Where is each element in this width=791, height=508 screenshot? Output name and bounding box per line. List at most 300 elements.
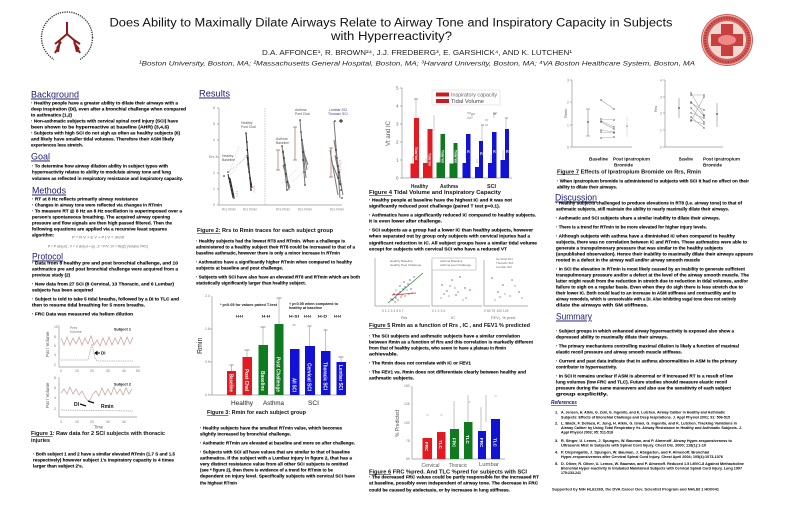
chart: figure 3 bars: 2.4 — [205, 294, 210, 298]
text: summary: · In SCI it remains unclear if ASM is abnormal or if increased RT is a result of low — [556, 374, 733, 378]
affiliations: ¹Boston University, Boston, MA; ²Massachusetts General Hospital, Boston, MA; ³Harvard University, Boston, MA; ⁴VA Boston Healthcare System, Boston, MA — [139, 60, 696, 68]
chart: figure 3 bars: Baseline — [259, 371, 265, 391]
chart: raw data subject 2: 30 — [106, 420, 110, 424]
text: discussion: airway remodels, which is unresolvable with a DI. Also inhibiting vagal tone does not entirely — [556, 296, 736, 302]
chart: figure 3 bars: † p<0.05 when compared to — [289, 302, 339, 306]
text: discussion: their lower IC. Both could lead to an increase in ASM stiffness and contractility and to — [556, 290, 736, 296]
chart: raw data subject 1: 8 — [54, 335, 56, 339]
text: references: D. Oliver, R. Oliver, U. Lemos, W. Bauman, and P. Almenoff. Reduced 1.5 LMVC-8 Against Methacholine — [561, 461, 745, 466]
chart: figure 2 traces: Baseline — [276, 141, 289, 145]
text: figure 4 notes: significantly reduced post challenge (paired T test p=0.1). — [369, 204, 500, 208]
heading: Discussion: Discussion — [555, 192, 597, 204]
text: goal: hyperreactivity relates to ability to modulate airway tone and lung — [32, 170, 171, 174]
text: figure 4 notes: significant reduction in IC. All subject groups have a similar tidal volume — [369, 240, 537, 246]
chart: figure 7 ipratropium left: 0 — [567, 146, 569, 150]
chart: figure 4 tidal volume and IC: 2 — [396, 140, 399, 144]
text: figure 3 notes: slightly increased by bronchial challenge. — [200, 432, 291, 436]
text: discussion: rooted in a defect in the airway wall and/or airway smooth muscle — [556, 258, 700, 262]
chart: raw data subject 2: 0 — [60, 420, 62, 424]
chart: raw data subject 2: 40 — [122, 420, 126, 424]
text: references: 1. — [555, 410, 558, 414]
text: protocol: · Subject is told to take 5 tidal breaths, followed by a DI to TLC and — [32, 296, 179, 302]
text: figure 3 notes: asthmatics. If the subject with a Lumbar injury in figure 2, that has a — [200, 456, 352, 460]
text: references: 4. — [555, 450, 558, 454]
chart: figure 6 FRC and TLC: TLC — [492, 438, 498, 447]
chart: figure 2 traces: 4 — [213, 138, 215, 142]
text: figure 3 notes: dependent on injury level. Specifically subjects with cervical SCI have — [200, 474, 355, 478]
text: background: experiences less stretch. — [31, 142, 83, 148]
chart: figure 3 bars — [197, 294, 346, 407]
chart: raw data subject 1: 50 — [136, 369, 140, 373]
chart: figure 6 FRC and TLC: FRC — [424, 442, 429, 452]
chart: figure 3 bars: H-H — [262, 314, 270, 318]
chart: figure 3 bars: H-H — [334, 314, 341, 318]
text: discussion: (unpublished observation). Hence their inability to maximally dilate their airways appears — [556, 252, 753, 256]
title: with Hyperreactivity? — [330, 31, 452, 43]
chart: figure 6 FRC and TLC: TLC — [438, 440, 443, 449]
text: protocol: subjects has been acquired — [32, 288, 93, 292]
chart: figure 5 scatter plots: Asthma Baseline — [440, 259, 463, 263]
text: figure 5 notes: from that of healthy subjects, who seem to have a plateau in Rmin — [369, 346, 506, 350]
text: references: P. Dicpinigaitis, J. Spungen, W. Bauman, J. Absgarten, and P. Almenoff. Bronchial — [561, 450, 709, 454]
chart: figure 3 bars: Asthma — [263, 401, 285, 407]
text: summary: group explicitly. — [556, 392, 608, 396]
chart: figure 4 tidal volume and IC: Tidal Vol — [454, 150, 458, 163]
text: goal: volumes as reflected in respiratory resistance and inspiratory capacity. — [32, 176, 183, 181]
chart: figure 6 FRC and TLC: 100 — [404, 421, 410, 425]
text: protocol: asthmatics pre and post bronchial challenge were acquired from a — [32, 266, 178, 272]
text: discussion: subjects, there was no correlation between IC and RTmin. These asthmatics were able to — [556, 240, 747, 244]
chart: figure 4 tidal volume and IC: Tidal Vol — [440, 150, 444, 163]
text: references: Hyper-responsiveness after Cervical Spinal Cord Injury. Chest April 2004; 105(4):1073-1076 — [561, 454, 724, 459]
chart: figure 2 traces: 6 — [213, 106, 215, 110]
chart: raw data subject 2: 20 — [90, 420, 94, 424]
chart: raw data subject 1: 6 — [54, 344, 56, 348]
text: references: 2. — [555, 420, 558, 426]
icon: lung logo — [42, 12, 92, 65]
chart: raw data subject 1: 40 — [122, 369, 126, 373]
chart: raw data subject 2: Subject 2 — [114, 382, 132, 386]
chart: raw data subject 1: DI — [101, 350, 106, 356]
chart: figure 3 bars: H-D — [318, 314, 327, 318]
text: methods — [32, 196, 182, 238]
chart: figure 5 scatter plots: 0 1 2 3 4 5 6 7 — [382, 309, 404, 313]
chart: figure 3 bars: H-H — [304, 314, 311, 318]
chart: raw data subject 1 — [45, 325, 140, 373]
chart: raw data subject 1: 10 — [75, 369, 79, 373]
chart: figure 3 bars: Cervical SCI — [306, 363, 312, 392]
text: references: R. Singer, U. Lemes, J. Spungen, W. Bauman, and P. Almenoff. Airway Hyper-responsiveness to — [561, 438, 733, 443]
heading: Results: Results — [199, 88, 230, 100]
chart: figure 2 traces: 5 — [213, 122, 215, 126]
text: references: Appl Physiol 2003; 95: 511-518 — [561, 430, 614, 434]
chart: figure 6 FRC and TLC: Cervical — [422, 463, 440, 469]
text: references: Airway Caliber by Using Total Respiratory Vs. Airway Resistance in Healthy and Asthmatic Subjects. J. — [561, 425, 742, 430]
text: methods: · Changes in airway tone were reflected via changes in RTmin — [32, 202, 162, 208]
chart: figure 2 traces: Asthma — [295, 108, 307, 112]
caption: figure 1: Figure 1 : Raw data for 2 SCI subjects with thoracic — [31, 431, 165, 437]
chart: figure 6 FRC and TLC: Thoracic — [449, 463, 467, 469]
text: funding: Supported by NIH HL62269, the DVA Career Dev. Scientist Program and NHLBI 1 HD0041 — [552, 486, 720, 492]
text: figure 2 notes: baseline asthmatic, however there is only a minor increase in RTmin — [196, 250, 340, 256]
chart: raw data subject 2: 2 — [54, 407, 56, 411]
chart: figure 6 FRC and TLC: 150 — [404, 384, 410, 388]
chart: raw data subject 2: 4 — [54, 396, 56, 400]
chart: figure 2 traces: Post Chal — [295, 112, 310, 116]
chart: figure 5 scatter plots: Healthy Baseline — [390, 259, 413, 263]
text: discussion: · There is a trend for RTmin to be more elevated for higher injury levels. — [556, 224, 707, 230]
chart: figure 3 bars: * p<0.05 for values paired T-test — [220, 303, 278, 307]
chart: figure 5 scatter plots: 0 50 75 100 125 — [484, 309, 509, 313]
text: figure 2 notes — [196, 238, 360, 286]
caption: figure 6: Figure 6 FRC %pred. And TLC %pred for subjects with SCI — [369, 470, 528, 476]
text: figure 5 notes: · The FEV1 vs. Rmin does not differentiate clearly between healthy and — [369, 370, 526, 374]
text: summary: elastic recoil pressure and airway smooth muscle stiffness. — [556, 350, 682, 354]
chart: raw data subject 1: Pres — [70, 326, 77, 330]
text: references: 3. — [555, 438, 558, 443]
text: discussion: asthmatic subjects, still maintain the ability to nearly maximally dilate their airways. — [556, 206, 729, 212]
chart: figure 2 traces: Thoracic SCI — [328, 112, 348, 116]
chart: figure 5 scatter plots: Thoracic SCI — [496, 261, 514, 265]
text: figure 2 notes: statistically significantly larger than healthy subject. — [196, 280, 306, 286]
chart: figure 2 traces: Healthy — [222, 154, 234, 158]
text: discussion: dilate the airways with SM stiffness. — [556, 302, 648, 308]
chart: figure 6 FRC and TLC: 75 — [406, 439, 410, 443]
text: methods: algorithm: — [32, 232, 54, 238]
text: figure 4 notes: except for subjects with cervical SCI who have a reduced VT — [369, 246, 507, 252]
text: background: been shown to be hyperreactive at baseline (AHR) (3,4,5) — [31, 124, 169, 130]
chart: raw data subject 1: Volume — [70, 330, 82, 334]
chart: raw data subject 1: 10 — [54, 325, 58, 329]
chart: figure 3 bars: 0.0 — [205, 393, 210, 397]
text: discussion: failure to sigh on a regular basis. Even when they do sigh there is less stretch due to — [556, 284, 743, 290]
text: protocol: previous study (2) — [32, 272, 70, 278]
chart: figure 2 traces: 2 — [213, 171, 215, 175]
labels: figure 7 axes: Baseline — [679, 156, 693, 162]
labels: figure 7 axes: Post Ipratropium — [703, 156, 740, 162]
text: protocol: then to resume tidal breathing for 5 more breaths. — [32, 302, 145, 308]
text: goal — [32, 164, 183, 181]
text: protocol: · New data from 27 SCI (8 Cervical, 13 Thoracic, and 6 Lumbar) — [32, 282, 174, 286]
chart: raw data subject 2: 6 — [54, 386, 56, 390]
heading: Background: Background — [31, 90, 79, 100]
chart: figure 7 ipratropium left: 1 — [567, 124, 569, 128]
chart: figure 4 tidal volume and IC: 1 — [396, 158, 399, 162]
chart: figure 5 scatter plots: FEV₁, % pred. — [491, 315, 516, 320]
labels: figure 7 axes: Baseline — [589, 156, 608, 162]
chart: figure 3 bars: 0.9 — [205, 360, 210, 364]
text: figure 3 notes: · Subjects with SCI all have values that are similar to that of baseline — [200, 450, 350, 454]
chart: figure 4 tidal volume and IC: Tidal Vol — [414, 147, 418, 160]
chart: figure 3 bars: Baseline — [228, 374, 234, 392]
chart: figure 7 ipratropium left: Rmin — [563, 109, 568, 118]
text: figure 6 notes — [369, 474, 539, 492]
text: figure 6 notes: · The decreased FRC values could be partly responsible for the increased RT — [369, 474, 539, 480]
chart: figure 2 traces: Rrs Rmin — [243, 208, 257, 212]
chart: figure 4 tidal volume and IC: Vt and IC — [386, 120, 392, 146]
chart: raw data subject 2: Pat / Volume — [45, 382, 50, 408]
chart: figure 4 tidal volume and IC: Tidal Volume — [451, 99, 484, 105]
text: figure 7 notes: ability to dilate their airways. — [557, 184, 617, 190]
text: background: and likely have smaller tidal volumes. Therefore their ASM likely — [31, 136, 174, 142]
chart: raw data subject 1: 2 — [54, 363, 56, 367]
chart: raw data subject 1: 0 — [60, 369, 62, 373]
text: references: 5. — [555, 461, 558, 466]
chart: raw data subject 1: 30 — [106, 369, 110, 373]
chart: figure 3 bars: Thoracic SCI — [322, 362, 328, 391]
chart: figure 5 scatter plots — [375, 257, 528, 320]
text: summary: contributor to hyperreactivity. — [556, 364, 617, 370]
text: summary: depressed ability to maximally dilate their airways. — [556, 334, 668, 340]
chart: figure 4 tidal volume and IC: Inspiratory capacity — [451, 92, 497, 98]
chart: figure 4 tidal volume and IC: Healthy — [411, 184, 429, 190]
chart: figure 3 bars: H-H — [236, 314, 243, 318]
text: discussion: · Asthmatic and SCI subjects share a similar inability to dilate their airways. — [556, 216, 720, 220]
chart: figure 3 bars: Healthy — [231, 401, 253, 407]
chart: figure 7 ipratropium left: 3 — [567, 78, 569, 82]
labels: figure 7 axes: Bromide — [614, 162, 633, 168]
equations: P = R V + E V + P | V = dV/dt — [72, 236, 125, 240]
text: figure 3 notes: · Healthy subjects have the smallest RTmin value, which becomes — [200, 426, 342, 430]
text: figure 3 notes: the highest RTmin — [200, 480, 237, 486]
text: figure 4 notes: when separated out by group only subjects with cervical injuries had a — [368, 234, 530, 238]
chart: figure 2 traces: Rrs Rmin — [330, 208, 344, 212]
text: discussion: generate a transpulmonary pressure that was similar to the healthy subjects — [556, 246, 723, 250]
caption: figure 5: Figure 5 Rmin as a function of Rrs , IC , and FEV1 % predicted — [369, 323, 530, 329]
text: references: A. Jensen, H. Atkin, G. Zeki, G. Ingenito, and K. Lutchen. Airway Caliber in Healthy and Asthmatic — [561, 410, 726, 414]
text: references: Ultrasonic Mist in Subjects with Spinal Cord Injury. Chest Dis. 2000; 118(1):1-10 — [561, 442, 706, 448]
text: summary: · The primary mechanisms controlling maximal dilation is likely a function of maximal — [556, 344, 739, 348]
text: methods: pressure and flow signals are then high passed filtered. Then the — [32, 220, 172, 226]
chart: figure 5 scatter plots: Rrs — [401, 315, 407, 320]
chart: figure 4 tidal volume and IC: 5 — [396, 86, 399, 90]
chart: figure 2 traces: Lumbar SCI — [329, 108, 347, 112]
text: discussion: · Although subjects with asthma have a diminished IC when compared to healthy — [556, 234, 735, 238]
text: discussion — [556, 200, 753, 308]
text: figure 4 notes: · Healthy people at baseline have the highest IC and it was not — [369, 198, 512, 202]
text: figure 4 notes: · SCI subjects as a group had a lower IC than healthy subjects, however — [369, 228, 533, 232]
text: protocol: · FRC Data was measured via helium dilution — [32, 312, 133, 316]
caption: figure 1: injuries — [31, 438, 50, 444]
chart: figure 7 ipratropium right — [653, 78, 723, 150]
chart: figure 6 FRC and TLC: TLC — [465, 435, 470, 444]
chart: figure 4 tidal volume and IC: 3 — [396, 122, 399, 126]
text: methods: · To measure RT @ 8 Hz an 8 Hz oscillation is superimposed over a — [32, 208, 182, 214]
text: summary: pressure during the same maneuvers and also use the sensitivity of each subject — [556, 386, 731, 390]
text: references: Bronchial Hyper-reactivity in Intubated Maintained Subjects with Cervical Spinal Cord Injury. Lung 1997 — [561, 466, 742, 470]
text: discussion: transpulmonary pressure and/or a defect at the level of the airway smooth muscle. The — [556, 272, 749, 278]
chart: raw data subject 1: 4 — [54, 353, 56, 357]
text: discussion: · Healthy subjects challenged to produce elevations in RT8 (i.e. airway tone) to that of — [556, 200, 742, 206]
chart: figure 3 bars: H-SI — [289, 314, 299, 318]
text: goal: · To determine how airway dilation ability in subject types with — [32, 164, 168, 168]
chart: figure 3 bars: SCI — [308, 401, 319, 407]
chart: figure 6 FRC and TLC: % Predicted — [395, 410, 401, 437]
icon: university seal — [701, 14, 753, 66]
caption: figure 1 — [31, 431, 165, 444]
equations: P = P sin(ωt) ; V = V sin(ωt + φ) ; Z = P/V ; R = Re(Z) (Volume FRC) — [48, 244, 149, 248]
chart: figure 2 traces: 0 — [213, 203, 215, 207]
text: protocol: · Data from 8 healthy pre and post bronchial challenge, and 10 — [32, 260, 178, 266]
text: background: · Healthy people have a greater ability to dilate their airways with a — [31, 100, 178, 106]
chart: figure 2 traces: Asthma — [276, 137, 288, 141]
chart: figure 6 FRC and TLC: 50 — [406, 457, 410, 461]
text: discussion: · In SCI the elevation in RTmin is most likely caused by an inability to generate sufficient — [556, 266, 745, 272]
chart: figure 5 scatter plots: Asthma post Challenge — [440, 263, 471, 267]
chart: raw data subject 1: 20 — [90, 369, 94, 373]
text: figure 5 notes: · The Rmin does not correlate with IC or FEV1 — [369, 360, 471, 366]
text: figure 5 notes — [369, 334, 533, 380]
chart: figure 3 bars: healthy at baseline — [289, 306, 322, 310]
chart: figure 2 traces: Rrs Rmin — [222, 208, 236, 212]
chart: raw data subject 2: Time — [94, 424, 104, 430]
chart: figure 3 bars: Rmin — [197, 338, 204, 354]
chart: figure 7 ipratropium right: 0 — [660, 146, 662, 150]
text: figure 2 notes: · Healthy subjects had the lowest RT8 and RTmin. When a challenge is — [196, 238, 345, 244]
text: summary: lung volumes (low FRC and TLC). Future studies should measure elastic recoil — [556, 380, 727, 384]
authors: D.A. AFFONCE¹, R. BROWN²⁴, J.J. FREDBERG³, E. GARSHICK⁴, AND K. LUTCHEN¹ — [262, 48, 573, 57]
text: background: deep inspiration (DI), even after a bronchial challenge when compared — [31, 106, 186, 112]
chart: figure 2 traces: Healthy — [241, 121, 253, 125]
chart: figure 4 tidal volume and IC: SCI — [487, 184, 496, 190]
title: Does Ability to Maximally Dilate Airways Relate to Airway Tone and Inspiratory Capacity in Subjects — [110, 18, 673, 30]
text: figure 3 notes: · Asthmatic RTmin are elevated at baseline and more so after challenge. — [200, 440, 355, 446]
chart: figure 6 FRC and TLC — [395, 384, 505, 469]
chart: figure 6 FRC and TLC: Lumbar — [479, 462, 499, 468]
chart: figure 2 traces — [209, 106, 348, 212]
chart: raw data subject 2: 8 — [54, 376, 56, 380]
chart: figure 7 ipratropium right: 2 — [660, 112, 662, 116]
chart: figure 3 bars: Lumbar SCI — [337, 365, 343, 391]
text: figure 5 notes: · The SCI subjects and asthmatic subjects have a similar correlation — [369, 334, 520, 338]
chart: figure 2 traces: 1 — [213, 187, 215, 191]
text: background: · Non-asthmatic subjects with cervical spinal cord injury (SCI) have — [31, 118, 178, 124]
text: references: L. Black, F. Dellaca, K. Jung, H. Atkin, G. Israel, G. Ingenito, and K. Lutchen. Tracking Variations in — [561, 420, 738, 426]
text: figure 5 notes: achievable. — [369, 352, 398, 356]
text: summary: · Current and past data indicate that in asthma abnormalities in ASM is the primary — [556, 358, 737, 364]
chart: figure 6 FRC and TLC: 125 — [404, 402, 410, 406]
chart: figure 3 bars: 1.8 — [205, 327, 210, 331]
chart: figure 4 tidal volume and IC: IC — [505, 150, 509, 154]
text: figure 1 notes: · Both subject 1 and 2 have a similar elevated RTmin (1.7 S and 1.5 — [33, 452, 175, 456]
chart: figure 7 ipratropium left — [563, 78, 632, 150]
caption: figure 7: Figure 7 Effects of Ipratropium Bromide on Rrs, Rmin — [557, 170, 701, 176]
text: figure 5 notes: between Rmin as a function of Rrs and this correlation is markedly different — [369, 340, 533, 344]
chart: figure 5 scatter plots: Cervical SCI — [496, 257, 513, 261]
text: figure 3 notes: (see * figure 2), then there is evidence of a trend for RTmin to be — [200, 468, 333, 472]
heading: Summary: Summary — [556, 312, 592, 322]
text: background — [31, 100, 186, 148]
labels: figure 7 axes: Bromide — [703, 162, 722, 168]
text: background: to asthmatics (1,2) — [31, 112, 72, 118]
text: figure 6 notes: could be caused by atelectasis, or by increases in lung stiffness. — [369, 488, 510, 492]
text: summary: · Subject groups in which enhanced airway hyperreactivity is exposed also show a — [556, 328, 734, 334]
chart: figure 4 tidal volume and IC — [386, 86, 512, 190]
chart: raw data subject 2: 10 — [75, 420, 79, 424]
text: figure 3 notes: very distinct resistance value from all other SCI subjects is omitted — [200, 462, 348, 466]
text: figure 1 notes — [33, 452, 175, 468]
chart: raw data subject 2: Rmin — [101, 404, 114, 410]
text: figure 1 notes: respectively) however subject 1's inspiratory capacity is 4 times — [33, 458, 174, 462]
chart: figure 4 tidal volume and IC: IC — [479, 152, 483, 156]
chart: figure 4 tidal volume and IC: Tidal Vol — [428, 153, 432, 166]
text: figure 4 notes: · Asthmatics have a significantly reduced IC compared to healthy subjects. — [369, 212, 536, 218]
labels: figure 7 axes: Post Ipratropium — [613, 156, 650, 162]
chart: figure 7 ipratropium right: Rrs — [653, 106, 658, 112]
heading: Methods: Methods — [32, 186, 66, 196]
text: references — [555, 410, 745, 475]
chart: figure 4 tidal volume and IC: IC — [466, 150, 470, 154]
caption: figure 3: Figure 3: Rmin for each subject group — [207, 410, 306, 416]
text: figure 1 notes: larger than subject 2's. — [33, 464, 83, 468]
chart: figure 7 ipratropium right: 1 — [660, 128, 662, 132]
text: figure 6 notes: at baseline, possibly even independent of airway tone. The decrease in FRC — [369, 480, 539, 486]
text: references: 175:233-241 — [561, 470, 582, 475]
chart: raw data subject 1: Pat / Volume — [45, 331, 50, 357]
chart: figure 2 traces: Baseline — [222, 158, 235, 162]
text: references: Subjects: Effects of Bronchial Challenge and Deep Inspirations. J. Appl Physiol 2001; 91: 506-515 — [561, 414, 731, 420]
chart: figure 7 ipratropium left: 2 — [567, 100, 569, 104]
heading: References: References — [551, 400, 577, 406]
labels: figure 7 axes — [589, 156, 740, 168]
chart: figure 3 bars: Post Chal — [243, 369, 249, 392]
text: figure 2 notes: · Asthmatics have a significantly higher RTmin when compared to healthy — [196, 260, 352, 264]
chart: figure 5 scatter plots: Lumbar SCI — [496, 265, 512, 269]
chart: raw data subject 1: Subject 1 — [114, 326, 132, 332]
text: figure 2 notes: · Subjects with SCI have also have an elevated RT8 and RTmin which are both — [196, 274, 360, 280]
chart: figure 3 bars: All SCI — [290, 378, 296, 393]
caption: figure 4: Figure 4 Tidal Volume and Inspiratory Capacity — [369, 190, 501, 196]
chart: figure 7 ipratropium right: 4 — [660, 78, 662, 82]
text: figure 2 notes: administered to a healthy subject their RT8 could be increased to that of a — [196, 244, 355, 250]
chart: figure 7 ipratropium right: 3 — [660, 96, 662, 100]
text: methods: following equations are applied via a recursive least squares — [32, 226, 167, 232]
chart: figure 2 traces: Rrs 3 — [209, 155, 217, 159]
chart: figure 4 tidal volume and IC: 4 — [396, 104, 399, 108]
text: summary — [556, 328, 739, 396]
text: figure 4 notes: It is even lower after challenge. — [369, 218, 442, 224]
text: figure 2 notes: subjects at baseline and post challenge. — [196, 266, 283, 270]
heading: Goal: Goal — [31, 152, 50, 162]
chart: figure 5 scatter plots: Healthy Post Challenge — [390, 263, 422, 267]
chart: figure 4 tidal volume and IC: 0 — [396, 176, 399, 180]
text: figure 3 notes — [200, 426, 355, 486]
chart: figure 5 scatter plots: 0 1 2 3 4 — [432, 309, 445, 313]
chart: figure 4 tidal volume and IC: IC — [492, 150, 496, 154]
text: protocol — [32, 260, 179, 316]
text: background: · Subjects with high SCI do not sigh as often as healthy subjects (6) — [31, 130, 180, 136]
chart: figure 2 traces: Rrs Rmin — [298, 208, 312, 212]
chart: raw data subject 2: DI — [74, 402, 80, 408]
heading: Protocol: Protocol — [32, 252, 63, 262]
text: discussion: latter might result from the reduction in stretch due to reduction in tidal volumes, and/or — [556, 278, 748, 284]
equations — [48, 236, 149, 248]
text: figure 7 notes — [557, 178, 749, 190]
chart: figure 6 FRC and TLC: FRC — [479, 438, 484, 448]
text: methods: person's spontaneous breathing. The acquired airway opening — [32, 214, 170, 220]
chart: figure 2 traces: Rrs Rmin — [276, 208, 290, 212]
text: figure 7 notes: · When ipratropium bromide is administered to subjects with SCI it had no effect on their — [557, 178, 749, 184]
chart: figure 2 traces: Post Chal — [241, 125, 256, 129]
text: figure 5 notes: asthmatic subjects. — [369, 376, 414, 380]
text: methods: · RT at 8 Hz reflects primarily airway resistance — [32, 196, 138, 202]
chart: raw data subject 2 — [45, 376, 137, 430]
chart: figure 4 tidal volume and IC: Asthma — [440, 184, 459, 190]
chart: figure 6 FRC and TLC: FRC — [452, 438, 456, 448]
text: figure 4 notes — [368, 198, 537, 252]
title — [110, 18, 673, 43]
chart: figure 5 scatter plots: IC — [451, 315, 455, 320]
